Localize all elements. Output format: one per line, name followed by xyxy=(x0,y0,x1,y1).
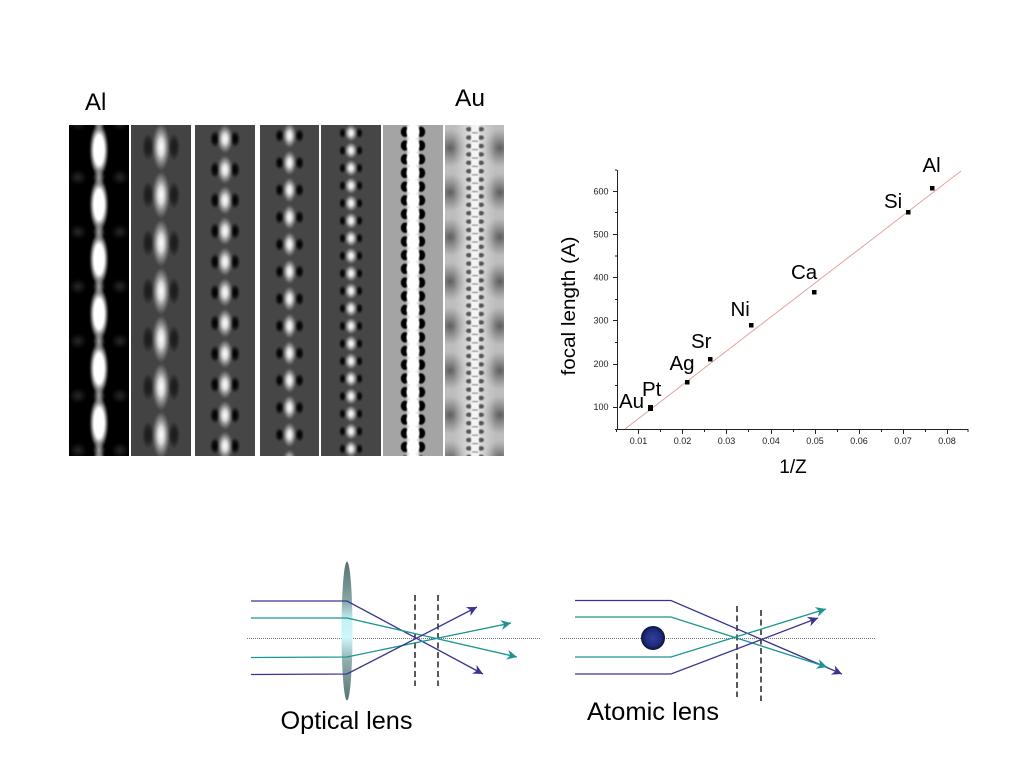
x axis tick labels: 0.05 xyxy=(806,436,824,446)
y axis tick labels xyxy=(593,186,609,412)
caption: Atomic lens xyxy=(587,698,719,726)
element labels: Au xyxy=(619,390,644,413)
y axis tick labels: 400 xyxy=(593,272,609,282)
element labels: Sr xyxy=(691,330,712,353)
y axis tick labels: 200 xyxy=(593,359,609,369)
x axis tick labels: 0.06 xyxy=(850,436,868,446)
y axis tick labels: 500 xyxy=(593,230,609,240)
chart: focal length vs 1/Z xyxy=(559,154,968,478)
focal plane markers xyxy=(737,606,761,701)
x axis tick labels: 0.04 xyxy=(762,436,780,446)
image panel 7 xyxy=(445,125,504,456)
x axis title: 1/Z xyxy=(779,457,807,478)
rays xyxy=(251,601,517,674)
y axis tick labels: 300 xyxy=(593,316,609,326)
element labels: Al xyxy=(922,154,941,177)
image panel 1 xyxy=(69,125,129,456)
fit line xyxy=(625,171,961,429)
y axis title: focal length (A) xyxy=(559,236,580,376)
caption: Optical lens xyxy=(280,707,412,735)
x axis tick labels: 0.08 xyxy=(938,436,956,446)
focal plane markers xyxy=(415,595,438,686)
x axis tick labels: 0.03 xyxy=(718,436,735,446)
x axis tick labels: 0.07 xyxy=(894,436,912,446)
y axis tick labels: 600 xyxy=(593,186,609,196)
rays xyxy=(575,600,842,674)
element labels: Ni xyxy=(730,298,750,321)
image strip series: Al to Au xyxy=(69,125,504,456)
diagram: atomic lens xyxy=(560,600,875,726)
atom xyxy=(641,626,665,650)
diagram: optical lens xyxy=(247,562,540,735)
x axis tick labels: 0.01 xyxy=(630,436,647,446)
lens xyxy=(342,562,352,700)
optical axis xyxy=(560,638,875,640)
image panel 2 xyxy=(131,125,191,456)
x axis tick labels: 0.02 xyxy=(674,436,691,446)
data points xyxy=(648,186,934,411)
optical axis xyxy=(247,638,540,640)
image panel 4 xyxy=(260,125,319,456)
chart axes xyxy=(613,170,968,434)
element labels: Ag xyxy=(670,352,695,375)
element labels: Pt xyxy=(642,378,662,401)
x axis tick labels xyxy=(630,436,956,446)
element labels: Ca xyxy=(791,261,818,284)
element labels xyxy=(619,154,941,413)
y axis tick labels: 100 xyxy=(593,402,609,412)
label: Au: Au xyxy=(455,85,485,112)
label: Al: Al xyxy=(85,89,106,116)
image panel 3 xyxy=(195,125,255,456)
image panel 6 xyxy=(383,125,443,456)
image panel 5 xyxy=(321,125,381,456)
element labels: Si xyxy=(884,190,902,213)
